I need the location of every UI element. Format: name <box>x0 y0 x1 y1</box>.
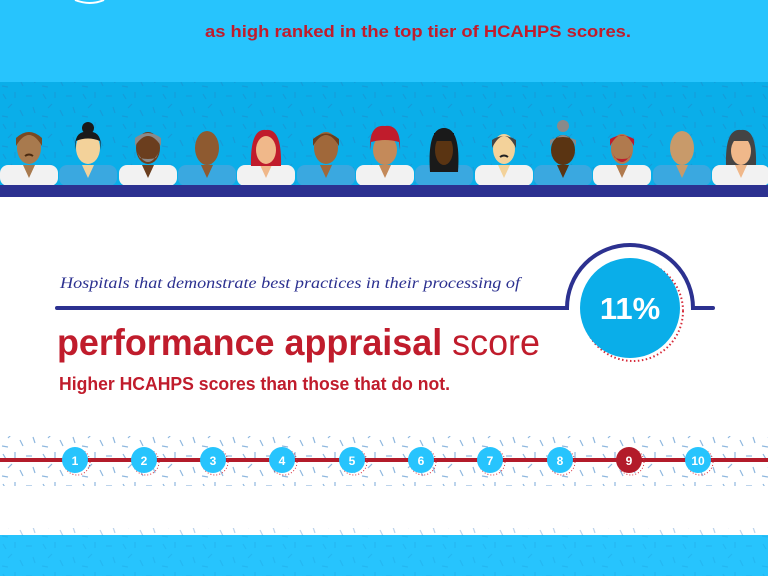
scale 1-10: 5 <box>349 454 356 468</box>
intro text: Hospitals that demonstrate best practices in their processing of <box>59 275 523 292</box>
headline: performance appraisal score <box>57 322 540 363</box>
top banner <box>0 0 768 82</box>
bottom banner <box>0 528 768 576</box>
subline: Higher HCAHPS scores than those that do not. <box>59 374 450 394</box>
scale 1-10: 10 <box>691 454 705 468</box>
people band <box>0 82 768 197</box>
scale 1-10: 4 <box>279 454 286 468</box>
scale 1-10 <box>0 436 768 486</box>
subtitle text: as high ranked in the top tier of HCAHPS scores. <box>205 22 631 41</box>
figures <box>0 120 768 186</box>
scale 1-10: 1 <box>72 454 79 468</box>
scale 1-10: 8 <box>557 454 564 468</box>
scale 1-10: 7 <box>487 454 494 468</box>
stat: 11%: 11% <box>600 291 660 326</box>
scale 1-10: 2 <box>141 454 148 468</box>
scale 1-10: 3 <box>210 454 217 468</box>
scale 1-10: 9 <box>626 454 633 468</box>
stat: 11% <box>57 245 713 361</box>
scale 1-10: 6 <box>418 454 425 468</box>
